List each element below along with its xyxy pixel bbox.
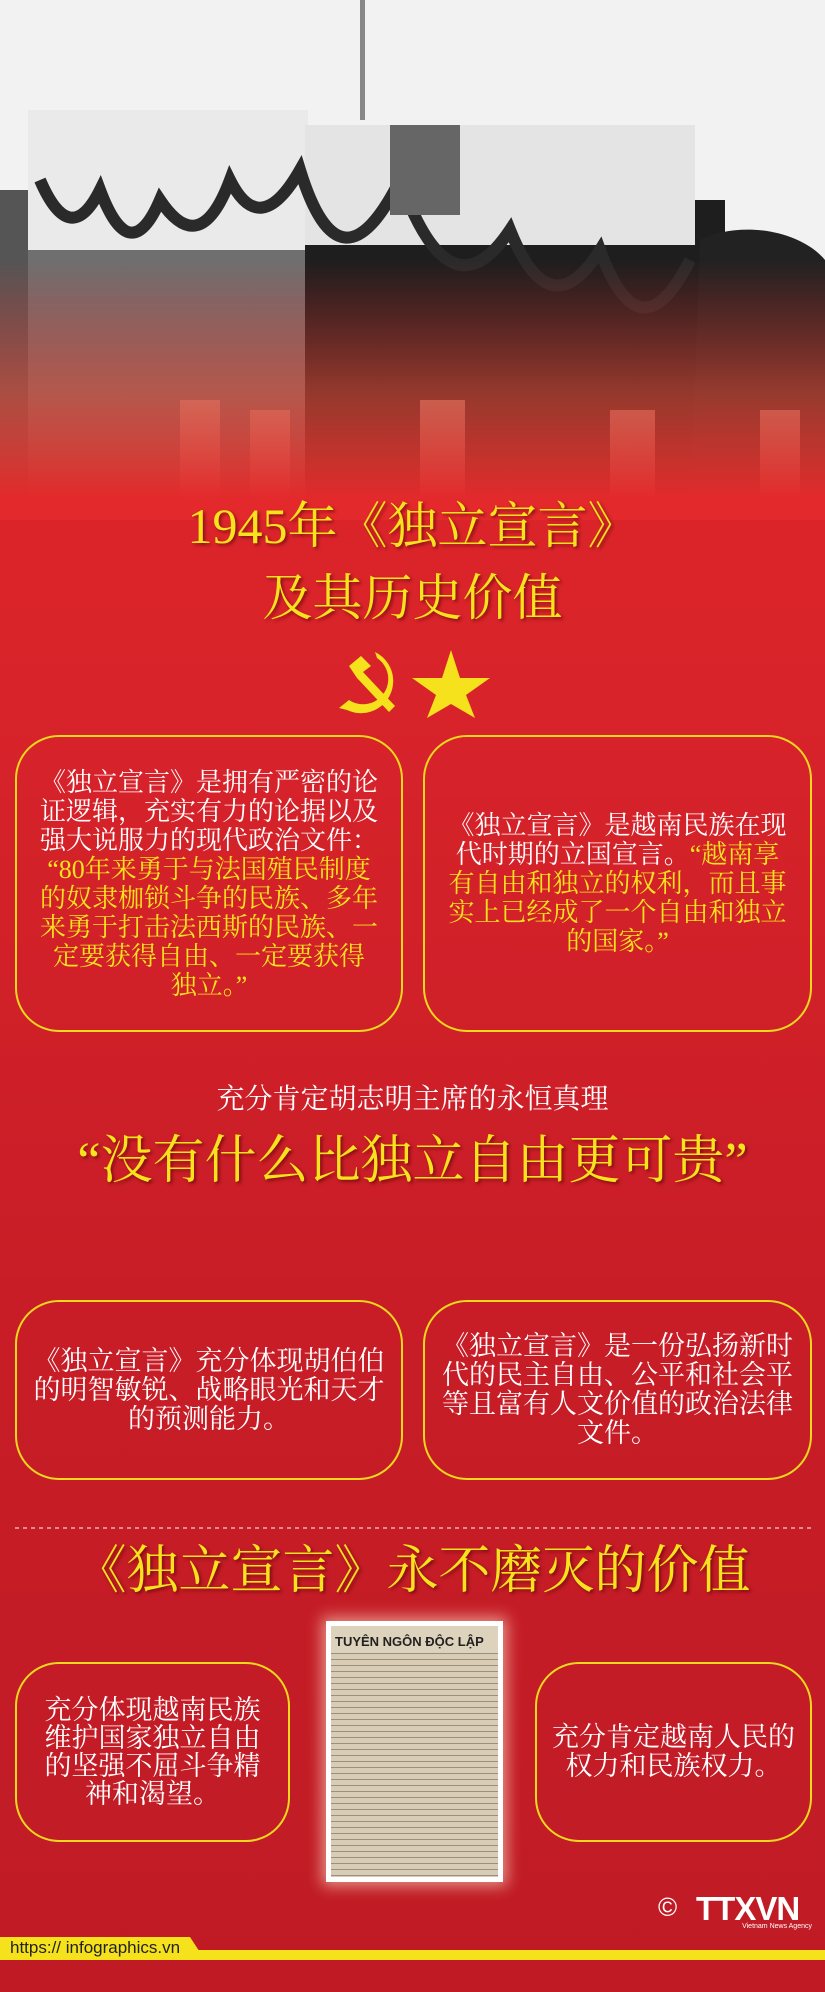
logo: TTXVN: © <box>658 1892 677 1922</box>
section title: 《独立宣言》永不磨灭的价值 <box>74 1543 750 1600</box>
panel: box 1: 强大说服力的现代政治文件： <box>40 826 378 854</box>
panel: box 1: 定要获得自由、一定要获得 <box>53 942 365 970</box>
panel: box 2: 的国家。” <box>566 927 669 956</box>
panel: box 2 <box>423 735 812 1032</box>
quote heading: “没有什么比独立自由更可贵” <box>77 1133 748 1190</box>
panel: box 1: “80年来勇于与法国殖民制度 <box>47 854 371 884</box>
panel: box 5: 维护国家独立自由 <box>44 1723 260 1753</box>
panel: box 1: 证逻辑，充实有力的论据以及 <box>40 796 378 826</box>
panel: box 4: 等且富有人文价值的政治法律 <box>442 1389 793 1419</box>
subheading: 充分肯定胡志明主席的永恒真理 <box>216 1084 608 1115</box>
panel: box 2: 代时期的立国宣言。“越南享 <box>456 840 779 869</box>
panel: box 1 <box>15 735 403 1032</box>
image: declaration document: TUYÊN NGÔN ĐỘC LẬP <box>335 1634 484 1649</box>
icon: hammer sickle and star <box>339 650 490 718</box>
panel: box 1: 独立。” <box>171 970 247 1000</box>
header photo <box>0 0 825 520</box>
title: 1945年《独立宣言》 <box>188 498 638 554</box>
footer: url bar: https:// infographics.vn <box>10 1938 180 1957</box>
panel: box 5: 充分体现越南民族 <box>44 1695 260 1725</box>
logo: TTXVN <box>658 1890 812 1930</box>
panel: box 5: 神和渴望。 <box>85 1779 220 1809</box>
logo: TTXVN: TTXVN <box>696 1890 799 1927</box>
panel: box 5: 的坚强不屈斗争精 <box>44 1751 260 1781</box>
panel: box 6: 权力和民族权力。 <box>566 1751 782 1781</box>
panel: box 6 <box>535 1662 812 1842</box>
panel: box 4 <box>423 1300 812 1480</box>
panel: box 1: 的奴隶枷锁斗争的民族、多年 <box>40 884 378 912</box>
title: 及其历史价值 <box>262 570 562 626</box>
panel: box 4: 文件。 <box>577 1418 658 1448</box>
title <box>188 498 638 626</box>
panel: box 5 <box>15 1662 290 1842</box>
footer: url bar <box>0 1937 825 1960</box>
panel: box 2: 实上已经成了一个自由和独立 <box>448 898 786 927</box>
panel: box 1: 《独立宣言》是拥有严密的论 <box>40 768 378 796</box>
panel: box 2: 《独立宣言》是越南民族在现 <box>448 811 786 840</box>
logo: TTXVN: Vietnam News Agency <box>742 1923 812 1930</box>
panel: box 3: 的明智敏锐、战略眼光和天才 <box>34 1374 384 1404</box>
image: declaration document <box>326 1621 503 1882</box>
panel: box 3: 《独立宣言》充分体现胡伯伯 <box>34 1346 384 1376</box>
panel: box 3: 的预测能力。 <box>128 1404 290 1434</box>
panel: box 6: 充分肯定越南人民的 <box>552 1722 795 1752</box>
panel: box 1: 来勇于打击法西斯的民族、一 <box>40 912 378 942</box>
panel: box 2: 有自由和独立的权利，而且事 <box>448 869 786 898</box>
panel: box 4: 《独立宣言》是一份弘扬新时 <box>442 1331 793 1361</box>
panel: box 3 <box>15 1300 403 1480</box>
panel: box 4: 代的民主自由、公平和社会平 <box>442 1360 793 1390</box>
